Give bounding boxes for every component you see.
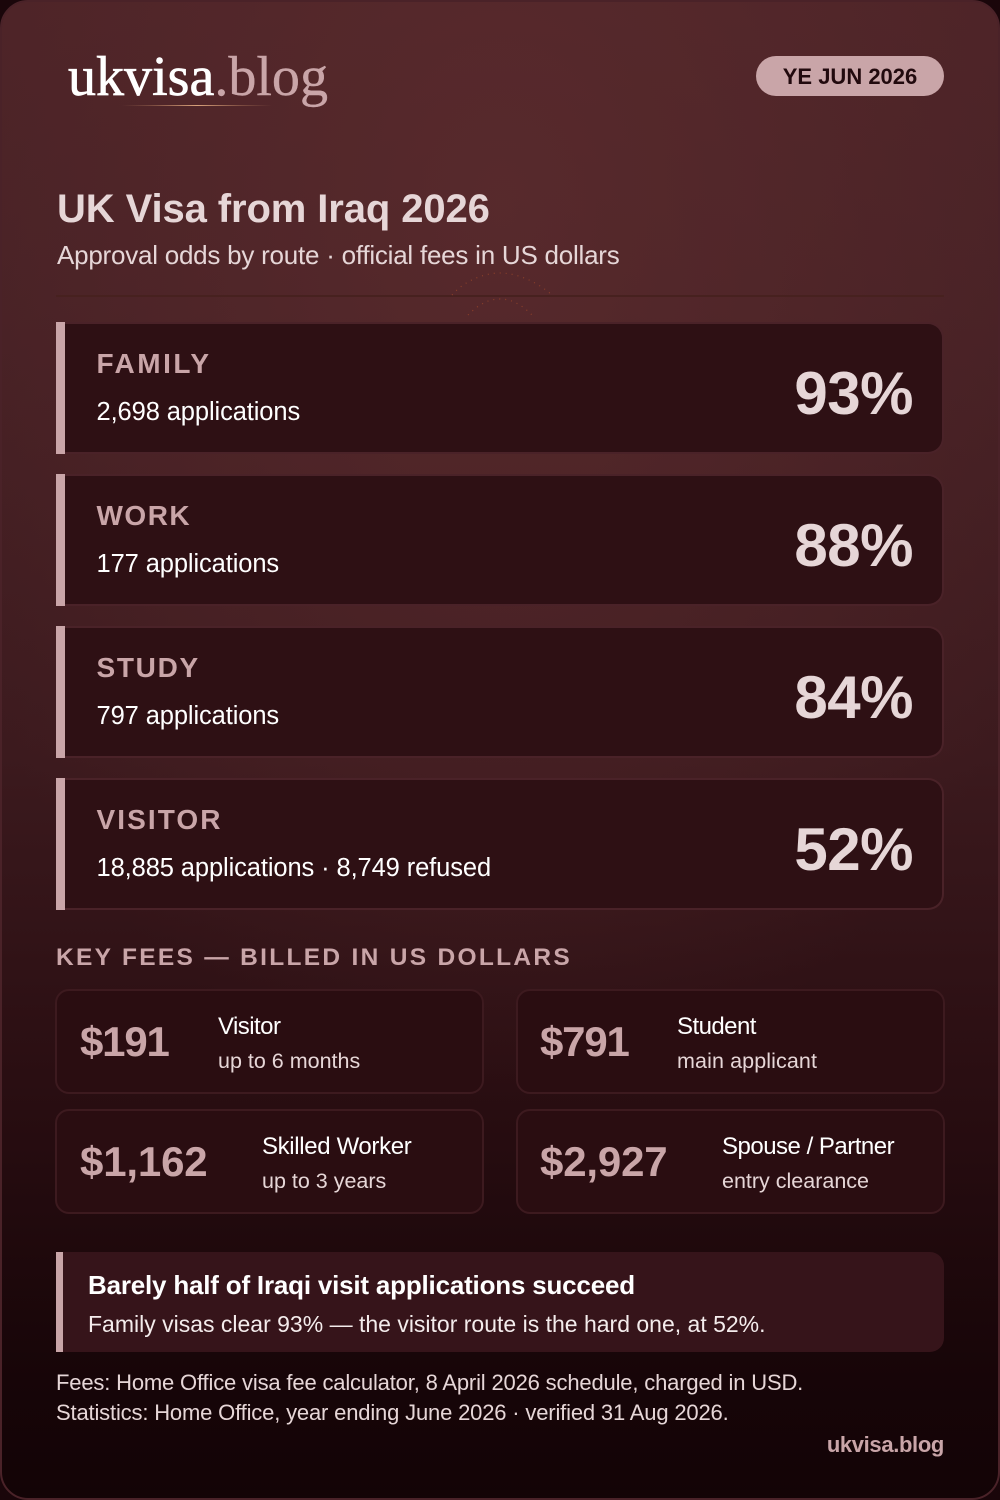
panel: work route [56,474,942,606]
callout [56,1252,944,1352]
panel: spouse fee: $2,927 [540,1138,667,1185]
heading: key fees: KEY FEES — BILLED IN US DOLLARS [56,944,572,971]
text: 18,885 applications · 8,749 refused [96,854,491,882]
decorative divider [56,295,944,297]
text: 52% [794,816,913,883]
panel: visitor fee: $191 [80,1018,169,1065]
panel: skilled worker fee: up to 3 years [262,1169,386,1193]
panel: spouse fee: entry clearance [722,1169,869,1193]
sources [56,1370,803,1424]
text: 84% [794,664,913,731]
panel: skilled worker fee [55,1109,484,1214]
panel: student fee: Student [677,1013,756,1040]
text: STUDY [96,652,200,683]
text: FAMILY [96,348,212,379]
text: WORK [96,500,191,531]
text: 2,698 applications [96,398,300,426]
callout body: Family visas clear 93% — the visitor route is the hard one, at 52%. [88,1311,766,1337]
panel: study route [56,626,944,758]
logo: ukvisa.blog [68,46,328,108]
panel: student fee: $791 [540,1018,629,1065]
panel: skilled worker fee: $1,162 [80,1138,207,1185]
panel: student fee [516,989,945,1094]
panel: visitor fee [55,989,484,1094]
sources: Fees: Home Office visa fee calculator, 8 April 2026 schedule, charged in USD. [56,1370,803,1395]
panel: visitor route [56,778,944,910]
panel: visitor fee: Visitor [218,1013,280,1040]
footer brand: ukvisa.blog [827,1432,944,1457]
title: UK Visa from Iraq 2026 [57,187,490,231]
panel: spouse fee: Spouse / Partner [722,1133,894,1160]
badge: year ending June 2026: YE JUN 2026 [783,64,917,89]
text: VISITOR [96,804,222,835]
text: 797 applications [96,702,279,730]
text: 177 applications [96,550,279,578]
badge: year ending June 2026 [756,56,944,96]
callout heading: Barely half of Iraqi visit applications succeed [88,1270,635,1300]
subtitle: Approval odds by route · official fees in US dollars [57,240,620,270]
panel: family route [56,322,942,454]
panel: visitor fee: up to 6 months [218,1049,360,1073]
text: 93% [794,360,913,427]
panel: student fee: main applicant [677,1049,817,1073]
sources: Statistics: Home Office, year ending June 2026 · verified 31 Aug 2026. [56,1400,729,1424]
panel: skilled worker fee: Skilled Worker [262,1133,411,1160]
text: 88% [794,512,913,579]
faint dotted arcs [452,272,550,316]
panel: spouse fee [516,1109,945,1214]
